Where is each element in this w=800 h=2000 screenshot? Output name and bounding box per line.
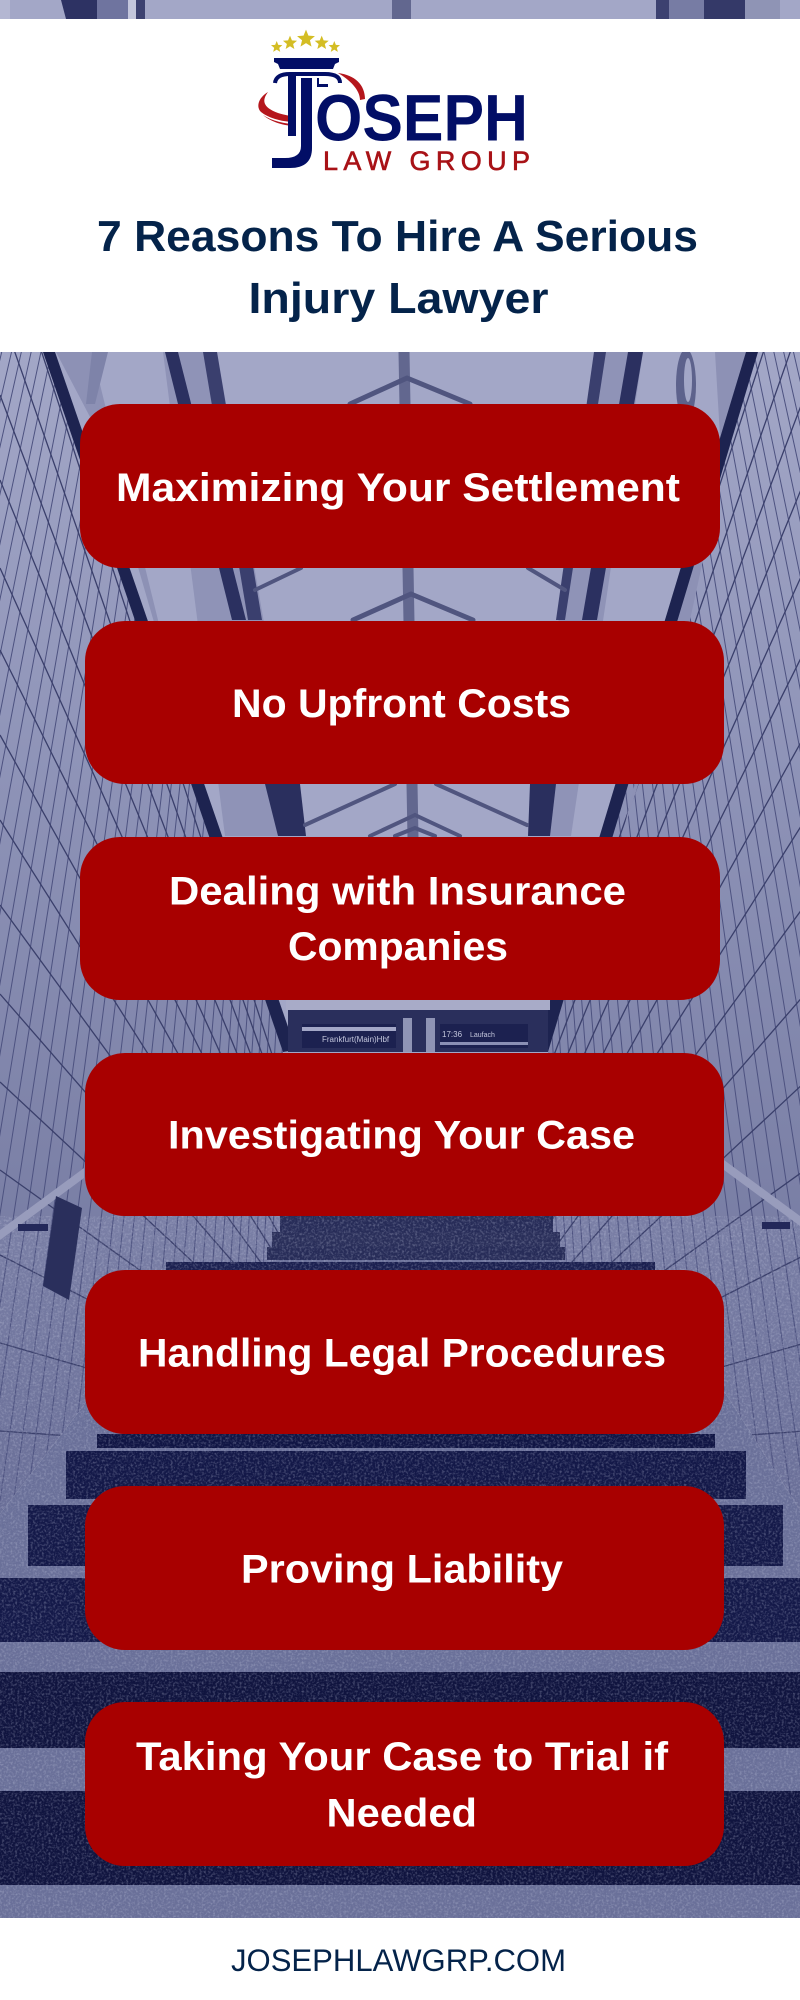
top strip beams (0, 0, 780, 19)
logo tagline: LAW GROUP (323, 146, 530, 176)
platform sign portal: Frankfurt(Main)Hbf (322, 1035, 390, 1044)
left wall (0, 352, 283, 1514)
card 1: Maximizing Your Settlement (116, 466, 680, 510)
handrails and wall sign (0, 1160, 800, 1300)
footer band (0, 1918, 800, 2000)
card 1 (80, 404, 720, 568)
right wall (548, 352, 800, 1510)
central ridge beam and trusses (255, 352, 565, 1000)
platform sign portal (286, 1000, 550, 1052)
footer website: JOSEPHLAWGRP.COM (231, 1942, 566, 1978)
header panel (0, 19, 800, 352)
logo wordmark: OSEPH (315, 81, 528, 155)
card 6: Proving Liability (241, 1548, 564, 1592)
title: 7 Reasons To Hire A Serious (97, 213, 698, 261)
card 4: Investigating Your Case (168, 1114, 635, 1158)
card 4 (85, 1053, 724, 1216)
title (97, 213, 698, 323)
card 5: Handling Legal Procedures (138, 1332, 666, 1376)
icon: column and J (272, 58, 340, 168)
card 3 (80, 837, 720, 1000)
card 6 (85, 1486, 724, 1650)
platform sign portal: 17:36 (442, 1030, 463, 1039)
card 7 (85, 1702, 724, 1866)
platform sign portal: Laufach (470, 1032, 495, 1039)
card 5 (85, 1270, 724, 1434)
ceiling skylight (0, 0, 800, 1060)
card 2 (85, 621, 724, 784)
title: Injury Lawyer (248, 275, 549, 323)
card 7: Needed (326, 1792, 477, 1836)
icon: five stars (271, 30, 340, 52)
left skylight frame (43, 352, 306, 1052)
staircase (0, 1216, 800, 1918)
card 2: No Upfront Costs (232, 682, 571, 726)
logo: Joseph Law Group (258, 30, 530, 176)
card 7: Taking Your Case to Trial if (136, 1735, 669, 1779)
card 3: Dealing with Insurance (169, 870, 626, 914)
right skylight frame (528, 349, 758, 1052)
icon: red swoosh (258, 73, 365, 126)
card 3: Companies (288, 925, 508, 969)
